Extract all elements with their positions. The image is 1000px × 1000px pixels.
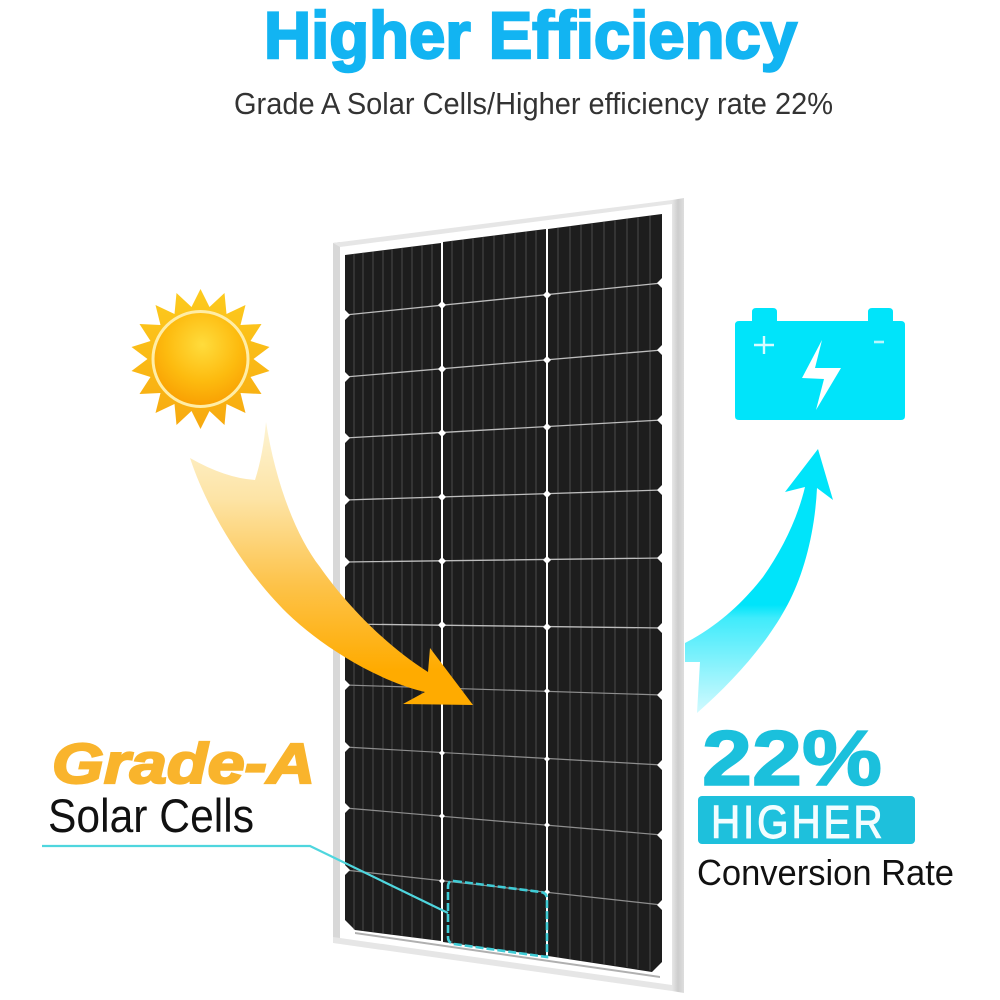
cell row lines (345, 283, 662, 905)
arrow: panel to battery (685, 449, 833, 713)
label: HIGHER (698, 796, 915, 849)
lightning bolt (802, 340, 841, 410)
callout: Solar Cells: Solar Cells (48, 789, 254, 842)
minus sign (874, 341, 884, 343)
plus sign (754, 336, 774, 354)
icon: sun (132, 289, 270, 429)
subtitle: Grade A Solar Cells/Higher efficiency rate 22% (234, 86, 833, 121)
callout: Grade-A: Grade-A (52, 732, 315, 796)
label text: HIGHER (711, 798, 883, 849)
leader line (42, 846, 448, 913)
battery body (735, 308, 905, 420)
arrow: sunlight to panel (190, 422, 473, 705)
solar cell columns (345, 214, 662, 972)
highlighted cell (448, 881, 547, 957)
solar panel (333, 198, 684, 993)
stat: 22%: 22% (702, 714, 882, 802)
cell busbars (354, 210, 650, 980)
icon: battery (735, 308, 905, 420)
sun rays (132, 289, 270, 429)
label: Conversion Rate: Conversion Rate (697, 852, 954, 893)
title: Higher Efficiency (264, 0, 797, 72)
sun disc (153, 312, 248, 406)
panel frame (333, 198, 684, 993)
label background (698, 796, 915, 844)
cell corner gaps (345, 278, 662, 910)
